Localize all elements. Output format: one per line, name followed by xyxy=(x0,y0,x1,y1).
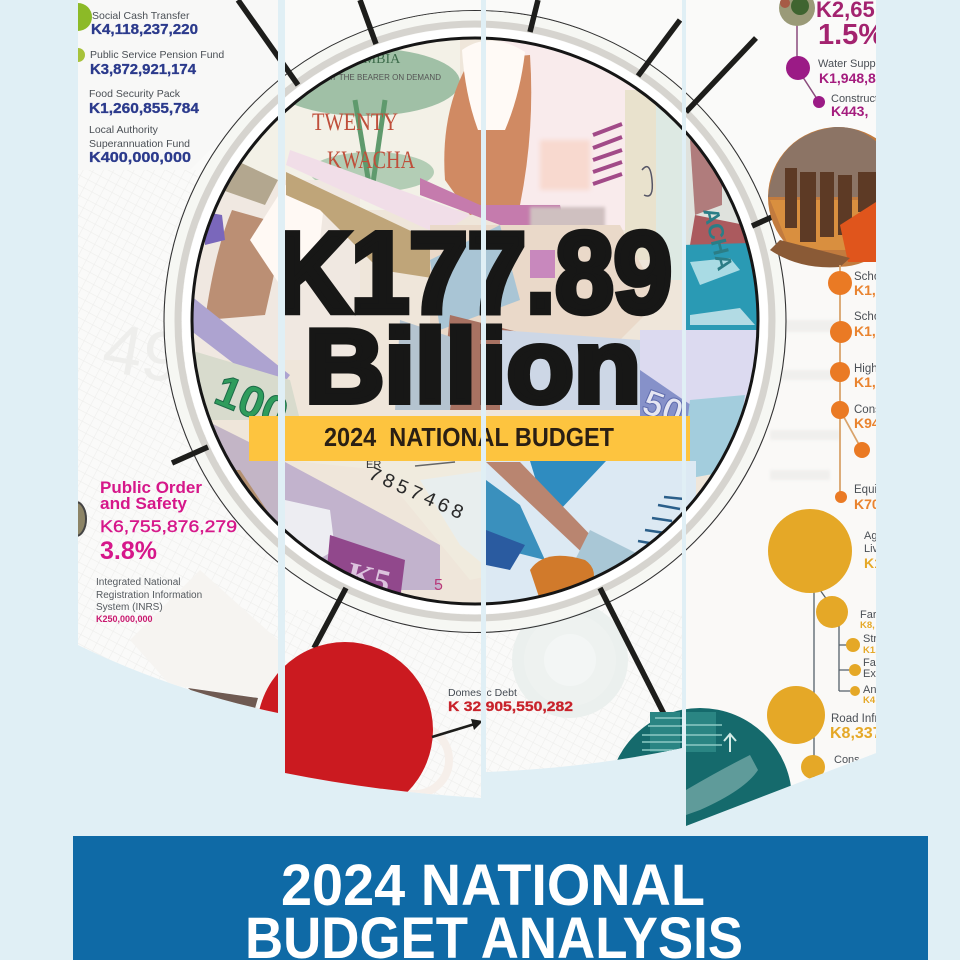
orange nodes xyxy=(828,271,870,503)
lower left green 100 note xyxy=(195,352,299,522)
domestic debt label xyxy=(448,687,573,714)
agriculture amounts: Live xyxy=(864,543,884,555)
left eagle and brown note xyxy=(190,150,470,395)
social protection amounts: Local Authority xyxy=(89,124,159,136)
water amounts: K1,948,8 xyxy=(819,70,876,86)
green banknote with tree: ZAMBIA xyxy=(345,52,401,67)
domestic debt label: K 32,905,550,282 xyxy=(448,698,573,714)
yellow nodes xyxy=(767,509,861,779)
connector lines xyxy=(796,26,816,98)
teal investment circle xyxy=(617,708,791,826)
serial number note: 7857468 xyxy=(364,463,467,526)
agriculture connector lines xyxy=(814,590,850,780)
agriculture amounts: K1 xyxy=(864,555,882,571)
social protection amounts: Public Service Pension Fund xyxy=(90,49,224,61)
blue note with K and 50 xyxy=(434,461,696,606)
social protection amounts: Superannuation Fund xyxy=(89,138,190,150)
green banknote with tree: PAY THE BEARER ON DEMAND xyxy=(322,73,441,82)
agriculture amounts xyxy=(830,530,886,766)
central mixed notes behind headline: 50 xyxy=(637,381,689,433)
public order heading: and Safety xyxy=(100,495,188,513)
education amounts: Equip xyxy=(854,484,883,496)
agriculture amounts: K8,337 xyxy=(830,725,882,742)
education connector lines xyxy=(839,265,859,492)
icon: schoolchildren photo xyxy=(768,127,876,268)
social protection amounts xyxy=(89,10,224,166)
education amounts: K70 xyxy=(854,496,880,512)
agriculture amounts: Cons xyxy=(834,754,860,766)
crest icon xyxy=(78,501,87,537)
agriculture amounts: Far xyxy=(863,657,880,669)
agriculture amounts: Str xyxy=(863,633,877,645)
right red and teal notes xyxy=(686,140,756,330)
education amounts: K1,5 xyxy=(854,323,884,339)
domestic debt label: Domestic Debt xyxy=(448,687,517,699)
education amounts: School xyxy=(854,311,889,323)
pink note right of eagle xyxy=(500,30,692,280)
headline billion: Billion xyxy=(305,309,641,425)
yellow budget band: 2024 NATIONAL BUDGET xyxy=(324,422,614,452)
social protection amounts: K4,118,237,220 xyxy=(91,22,198,38)
icon: environment photo xyxy=(779,0,815,26)
water amounts xyxy=(817,2,876,118)
public order heading xyxy=(100,479,237,565)
money collage photo xyxy=(190,30,765,606)
lower left green 100 note: 100 xyxy=(208,366,295,439)
panel: education xyxy=(768,127,876,509)
brown photo fragment at panel base xyxy=(188,688,258,708)
registration system item: K250,000,000 xyxy=(96,614,153,624)
public order heading: K6,755,876,279 xyxy=(100,517,237,536)
agriculture amounts: Farm xyxy=(860,609,886,621)
education amounts: K94 xyxy=(854,415,880,431)
social protection amounts: Social Cash Transfer xyxy=(92,10,190,22)
education amounts: K1,6 xyxy=(854,282,884,298)
registration system item xyxy=(96,577,202,624)
education amounts xyxy=(854,271,889,512)
green banknote with tree: TWENTY xyxy=(312,109,398,136)
education amounts: K1,2 xyxy=(854,374,884,390)
K5 purple note: K5 xyxy=(343,556,394,602)
blue note with K and 50: 5 xyxy=(434,577,443,594)
water amounts: K443, xyxy=(831,103,868,119)
eagle xyxy=(420,40,605,229)
spokes xyxy=(172,0,772,718)
public order heading: 3.8% xyxy=(100,537,157,565)
social protection amounts: Food Security Pack xyxy=(89,88,181,100)
education amounts: School xyxy=(854,271,889,283)
agriculture amounts: K8, xyxy=(860,620,875,631)
paper with banknote watermark xyxy=(78,0,878,830)
agriculture amounts: K1, xyxy=(863,645,878,656)
water amounts: 1.5% xyxy=(818,19,884,51)
social protection amounts: K400,000,000 xyxy=(89,150,191,166)
ring around photo xyxy=(164,10,786,632)
agriculture amounts: Agri xyxy=(864,530,884,542)
green banknote with tree xyxy=(242,40,460,210)
education amounts: Cons xyxy=(854,404,881,416)
central mixed notes behind headline xyxy=(395,225,760,480)
education amounts: High xyxy=(854,363,878,375)
social protection amounts: K1,260,855,784 xyxy=(89,101,199,117)
panel: agriculture and roads xyxy=(767,509,886,780)
yellow budget band xyxy=(249,416,690,461)
green markers xyxy=(78,3,92,62)
panel: social protection xyxy=(78,3,224,164)
title banner xyxy=(73,836,928,960)
sliced poster xyxy=(78,0,876,826)
agriculture amounts: K4 xyxy=(863,695,876,706)
panel: public order and safety xyxy=(66,479,237,624)
red domestic debt circle xyxy=(260,642,433,792)
serial number note xyxy=(366,461,481,562)
water amounts: Water Supply xyxy=(818,58,884,70)
agriculture amounts: An xyxy=(863,684,876,696)
registration system item: System (INRS) xyxy=(96,602,163,613)
agriculture amounts: Ext xyxy=(863,668,879,680)
right red and teal notes: ACHA xyxy=(698,205,738,273)
headline amount: K177.89 xyxy=(275,210,672,337)
social protection amounts: K3,872,921,174 xyxy=(90,62,196,78)
photo edge xyxy=(192,38,758,604)
paper with banknote watermark: 49 xyxy=(97,308,188,398)
public order heading: Public Order xyxy=(100,479,203,497)
panel: water and sanitation xyxy=(779,0,876,118)
agriculture amounts: Road Infra xyxy=(831,713,885,725)
title banner: 2024 NATIONAL xyxy=(281,853,705,918)
K5 purple note xyxy=(285,462,440,602)
serial number note: ER xyxy=(366,459,381,471)
registration system item: Integrated National xyxy=(96,577,181,588)
green banknote with tree: KWACHA xyxy=(327,147,415,174)
registration system item: Registration Information xyxy=(96,590,202,601)
debt arrow xyxy=(432,719,483,737)
water amounts: Construction xyxy=(831,93,893,105)
purple nodes xyxy=(786,56,825,108)
